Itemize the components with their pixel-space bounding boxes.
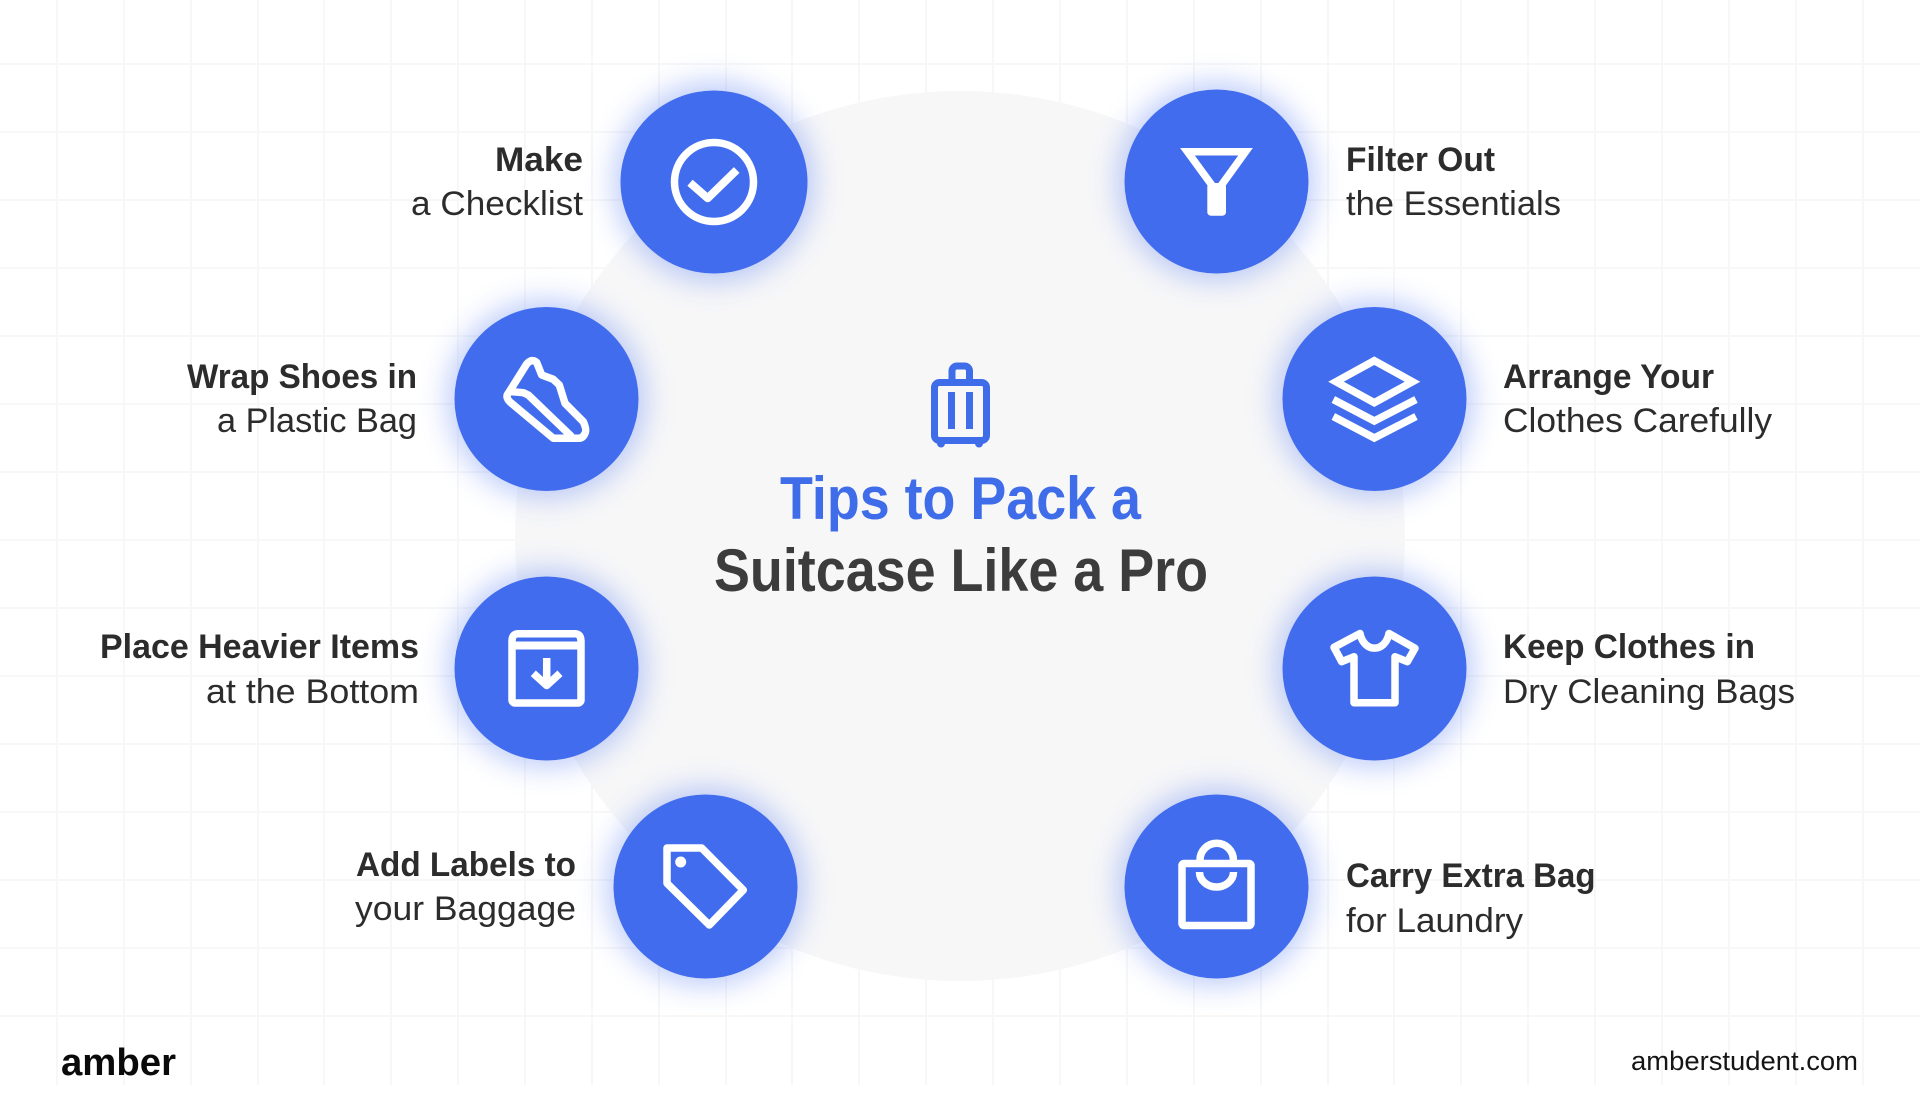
title	[714, 465, 1208, 604]
label: filter out essentials	[1346, 141, 1561, 223]
icon: layers	[1333, 361, 1416, 438]
panel: central background circle	[515, 91, 1405, 981]
label: wrap shoes	[187, 358, 417, 440]
label: filter out essentials: the Essentials	[1346, 185, 1561, 223]
step: filter out essentials	[1118, 84, 1314, 280]
label: arrange clothes: Clothes Carefully	[1503, 402, 1772, 440]
label: carry extra bag: for Laundry	[1346, 902, 1523, 940]
label: add labels: your Baggage	[355, 890, 576, 928]
label: carry extra bag	[1346, 857, 1596, 940]
label: carry extra bag: Carry Extra Bag	[1346, 857, 1596, 895]
label: wrap shoes: Wrap Shoes in	[187, 358, 417, 396]
title: Tips to Pack a	[780, 465, 1142, 532]
label: arrange clothes	[1503, 358, 1772, 440]
label: make a checklist	[411, 141, 584, 223]
label: add labels: Add Labels to	[356, 846, 576, 884]
label: make a checklist: a Checklist	[411, 185, 584, 223]
step: arrange clothes	[1276, 301, 1472, 497]
logo: amber: amber	[61, 1042, 176, 1084]
label: place heavier items: at the Bottom	[206, 673, 419, 711]
label: filter out essentials: Filter Out	[1346, 141, 1495, 179]
icon: t-shirt	[1334, 634, 1415, 703]
icon: check circle	[674, 142, 754, 222]
label: wrap shoes: a Plastic Bag	[217, 402, 417, 440]
step: place heavier items	[448, 570, 644, 766]
label: place heavier items: Place Heavier Items	[100, 628, 419, 666]
footer url: amberstudent.com	[1631, 1046, 1858, 1076]
label: keep clothes in dry cleaning bags: Keep Clothes in	[1503, 628, 1755, 666]
icon: box with down arrow	[512, 634, 581, 703]
label: make a checklist: Make	[495, 141, 583, 179]
icon: shoe	[507, 361, 586, 438]
step: add labels	[608, 788, 804, 984]
label: place heavier items	[100, 628, 419, 711]
step: wrap shoes	[448, 301, 644, 497]
label: arrange clothes: Arrange Your	[1503, 358, 1714, 396]
label: keep clothes in dry cleaning bags	[1503, 628, 1795, 711]
step: carry extra bag	[1118, 788, 1314, 984]
step: keep clothes in dry cleaning bags	[1276, 570, 1472, 766]
label: add labels	[355, 846, 576, 928]
icon: price tag	[667, 848, 743, 925]
label: keep clothes in dry cleaning bags: Dry Cleaning Bags	[1503, 673, 1795, 711]
title: Suitcase Like a Pro	[714, 537, 1208, 604]
icon: shopping bag	[1182, 843, 1251, 926]
step: make a checklist	[615, 83, 813, 281]
icon: funnel	[1188, 152, 1246, 216]
icon: suitcase	[934, 366, 986, 448]
